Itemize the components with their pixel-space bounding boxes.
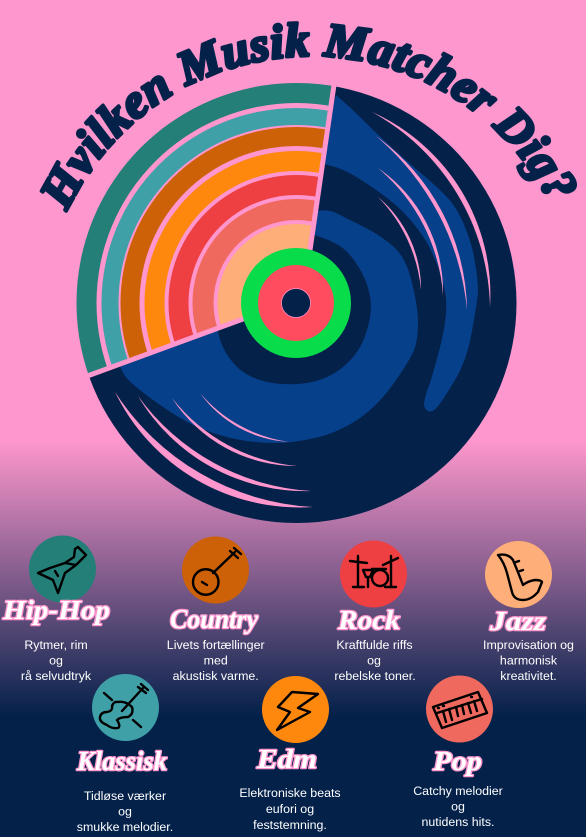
genre: Country: med — [204, 654, 228, 668]
genre: Klassisk: Tidløse værker — [84, 789, 166, 803]
genre: Jazz: kreativitet. — [500, 669, 557, 683]
genre: Hip-Hop: og — [49, 654, 63, 668]
genre: Jazz — [483, 541, 574, 683]
genre: Pop — [413, 676, 503, 829]
record disc — [76, 83, 516, 523]
genre: Edm — [239, 676, 341, 832]
genre: Pop: nutidens hits. — [421, 815, 495, 829]
genre: Rock: rebelske toner. — [334, 669, 416, 683]
genre: Country: Livets fortællinger — [167, 638, 265, 652]
outer blue sheen — [318, 95, 478, 411]
genre: Hip-Hop: rå selvudtryk — [21, 669, 92, 683]
genre: Klassisk: smukke melodier. — [77, 820, 173, 834]
genre: Country: Country — [170, 604, 259, 634]
icon: drum kit — [350, 556, 398, 587]
genre colour bands — [76, 83, 332, 373]
genre: Country — [167, 536, 265, 683]
icon: lightning bolt — [277, 692, 318, 730]
title: Hvilken Musik Matcher Dig? — [40, 21, 577, 213]
genre: Edm: eufori og — [266, 802, 314, 816]
genre: Klassisk: Klassisk — [76, 746, 167, 776]
icon: banjo — [193, 548, 241, 595]
genre: Pop: Pop — [432, 746, 482, 776]
genre: Pop: og — [451, 800, 465, 814]
genre: Edm: Edm — [256, 744, 317, 774]
genre: Country: akustisk varme. — [173, 669, 259, 683]
genre: Rock: Rock — [337, 605, 401, 635]
genre: Hip-Hop: Rytmer, rim — [24, 638, 88, 652]
record label — [241, 248, 351, 358]
genre: Hip-Hop — [2, 536, 110, 683]
wedge dividers — [86, 85, 334, 376]
inner blue sheen — [118, 210, 418, 443]
record grooves — [115, 112, 490, 507]
genre: Hip-Hop: Hip-Hop — [2, 595, 110, 625]
genre: Klassisk: og — [118, 804, 132, 818]
genre: Rock — [334, 540, 416, 683]
genre: Rock: Kraftfulde riffs — [336, 638, 413, 652]
genre: Rock: og — [367, 654, 381, 668]
genre: Edm: Elektroniske beats — [239, 786, 341, 800]
icon: keyboard — [433, 692, 487, 728]
genre: Jazz: Jazz — [489, 606, 547, 636]
vinyl record — [76, 82, 518, 524]
genre: Pop: Catchy melodier — [413, 784, 503, 798]
icon: electric guitar — [38, 547, 86, 593]
genre: Edm: feststemning. — [253, 818, 327, 832]
genre: Jazz: harmonisk — [500, 654, 558, 668]
icon: violin — [100, 684, 148, 728]
genre: Klassisk — [76, 674, 173, 834]
genre: Jazz: Improvisation og — [483, 638, 574, 652]
icon: saxophone — [498, 555, 542, 600]
